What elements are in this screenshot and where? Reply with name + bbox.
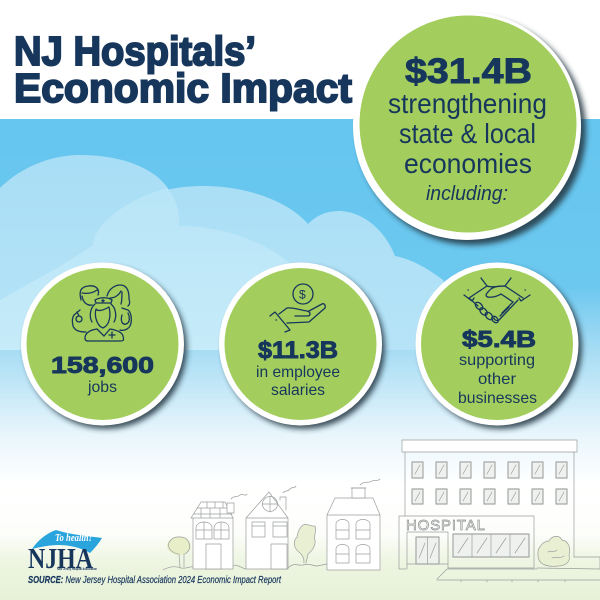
clouds — [0, 155, 480, 350]
title: NJ Hospitals’ — [14, 28, 256, 74]
salaries figure: $11.3B — [258, 337, 338, 364]
icon: shrub — [538, 536, 570, 566]
house two — [246, 486, 296, 569]
salaries label: salaries — [271, 382, 325, 399]
businesses label: supporting — [459, 352, 535, 369]
description: economies — [404, 148, 532, 179]
panel: jobs — [21, 262, 187, 429]
description: strengthening — [388, 88, 547, 119]
icon: small tree — [167, 537, 191, 567]
description: state & local — [399, 118, 536, 149]
panel: other businesses — [416, 262, 582, 429]
businesses label — [458, 352, 537, 407]
panel: salaries — [219, 262, 385, 429]
title: Economic Impact — [14, 65, 352, 111]
icon: handshake — [464, 278, 530, 324]
logo: NJHA: To health! — [55, 533, 92, 544]
title — [14, 28, 352, 111]
icon: medical staff — [72, 285, 131, 341]
description: including: — [426, 183, 508, 205]
businesses figure: $5.4B — [462, 326, 536, 352]
salaries label: in employee — [256, 364, 340, 381]
illustration: hospital building — [399, 440, 600, 582]
jobs label: jobs — [87, 379, 117, 396]
icon: hand holding coin: $ — [299, 288, 306, 302]
businesses label: businesses — [458, 390, 537, 407]
total amount: $31.4B — [405, 52, 532, 91]
salaries label — [256, 364, 340, 399]
house one — [191, 494, 247, 569]
house three — [327, 479, 380, 570]
source note: SOURCE: New Jersey Hospital Association 2024 Economic Impact Report — [28, 575, 282, 586]
illustration: row of houses — [163, 479, 380, 570]
panel: total impact circle — [353, 12, 586, 245]
logo: NJHA: NJHA — [28, 544, 94, 575]
logo: NJHA — [28, 530, 102, 575]
logo: NJHA: New Jersey Hospital Association — [57, 567, 97, 571]
jobs figure: 158,600 — [51, 352, 154, 378]
businesses label: other — [478, 371, 517, 388]
description — [388, 88, 547, 205]
icon: hand holding coin — [270, 284, 325, 332]
hospital sign: HOSPITAL — [406, 517, 485, 534]
icon: tall tree — [294, 524, 316, 563]
